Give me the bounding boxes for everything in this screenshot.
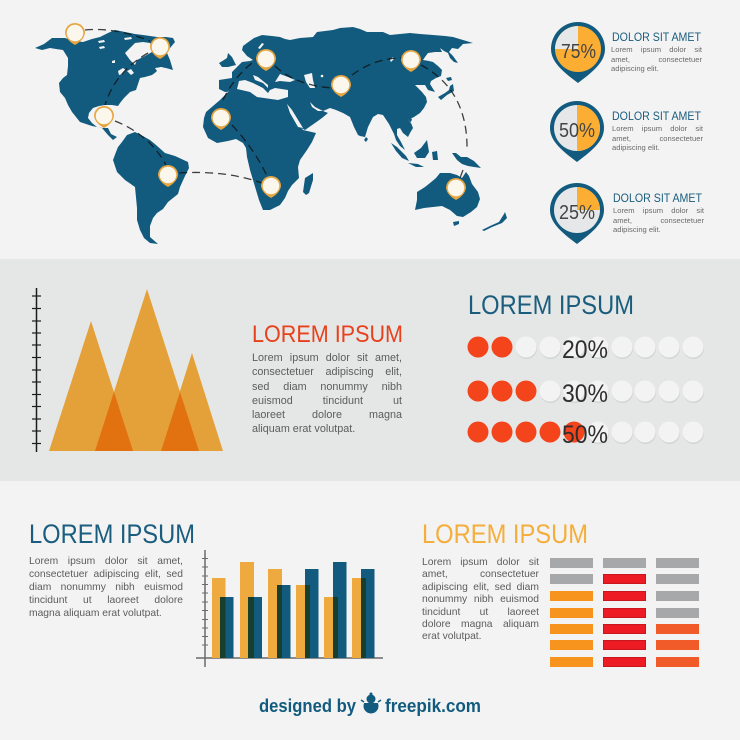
world map xyxy=(35,23,507,244)
overlap left xyxy=(95,392,133,451)
bottom left paragraph: magna aliquam erat volutpat. xyxy=(29,608,162,619)
bottom left paragraph xyxy=(29,556,183,619)
stat text 2: amet, consectetuer xyxy=(612,134,703,142)
North America xyxy=(35,30,175,140)
blue heading: LOREM IPSUM xyxy=(468,290,634,320)
bottom right paragraph: dolore magna aliquam xyxy=(422,619,539,630)
stat text 3: Lorem ipsum dolor sit xyxy=(613,206,704,215)
bar chart xyxy=(196,550,383,667)
dot rows xyxy=(468,336,704,449)
percent pin 50%: 50% xyxy=(559,120,595,142)
dot row 20% xyxy=(468,336,704,364)
bottom right paragraph xyxy=(422,557,539,642)
stat text 2: adipiscing elit. xyxy=(612,143,660,152)
seas and lakes xyxy=(98,37,394,128)
axes xyxy=(196,550,383,667)
bottom right heading: LOREM IPSUM xyxy=(422,519,588,549)
middle paragraph: Lorem ipsum dolor sit amet, xyxy=(252,352,402,364)
dashed routes xyxy=(85,29,467,183)
overlap right xyxy=(161,392,199,451)
stat text 1: adipiscing elit. xyxy=(611,64,659,73)
bottom right paragraph: nonummy nibh euismod xyxy=(422,594,539,605)
continents xyxy=(35,27,507,244)
bottom left paragraph: tincidunt ut laoreet dolore xyxy=(29,595,183,606)
footer credit xyxy=(259,692,481,716)
stat heading 3: DOLOR SIT AMET xyxy=(613,191,703,205)
islands xyxy=(219,53,507,231)
percent pin 75%: 75% xyxy=(561,41,596,63)
bottom right paragraph: tincidunt ut laoreet xyxy=(422,607,539,618)
Eurasia xyxy=(219,27,473,150)
dot row 30% xyxy=(468,380,704,408)
footer credit: freepik.com xyxy=(385,696,481,716)
bar overlaps xyxy=(220,578,366,658)
stat text 1 xyxy=(611,45,702,73)
stat heading 2: DOLOR SIT AMET xyxy=(612,109,702,123)
middle paragraph: sed diam nonummy nibh xyxy=(252,381,402,393)
icon: freepik mascot xyxy=(361,692,381,714)
stat text 3: adipiscing elit. xyxy=(613,225,661,234)
middle paragraph xyxy=(252,352,402,435)
middle paragraph: euismod tincidunt ut xyxy=(252,395,402,407)
bottom left paragraph: consectetuer adipiscing elit, sed xyxy=(29,569,183,580)
red heading: LOREM IPSUM xyxy=(252,321,403,348)
stat text 2: Lorem ipsum dolor sit xyxy=(612,124,703,133)
ruler axis xyxy=(32,288,41,452)
South America xyxy=(113,132,189,244)
bottom right paragraph: adipiscing elit, sed diam xyxy=(422,582,539,593)
bottom right paragraph: amet, consectetuer xyxy=(422,569,539,580)
middle paragraph: consectetuer adipiscing elit, xyxy=(252,366,402,378)
stat text 2 xyxy=(612,124,703,152)
middle paragraph: laoreet dolore magna xyxy=(252,409,402,421)
percent pin 50% xyxy=(550,101,604,162)
middle band background xyxy=(0,259,740,481)
percent pin 25% xyxy=(550,183,604,244)
stat text 3 xyxy=(613,206,704,234)
dot row 50% xyxy=(468,421,704,449)
dot row 20%: 20% xyxy=(562,336,608,364)
percent pin 25%: 25% xyxy=(559,202,595,224)
blue bars xyxy=(220,562,374,658)
dot row 30%: 30% xyxy=(562,380,608,408)
bottom right paragraph: erat volutpat. xyxy=(422,631,482,642)
Africa xyxy=(203,89,316,210)
stat text 1: Lorem ipsum dolor sit xyxy=(611,45,702,54)
stat text 1: amet, consectetuer xyxy=(611,54,702,64)
percent pin 75% xyxy=(551,22,605,83)
block grid xyxy=(550,558,699,667)
bottom left paragraph: diam nonummy nibh euismod xyxy=(29,582,183,593)
deep orange blocks xyxy=(656,624,699,667)
bottom right paragraph: Lorem ipsum dolor sit xyxy=(422,557,539,568)
stat text 3: amet, consectetuer xyxy=(613,216,704,224)
dot row 50%: 50% xyxy=(562,421,608,449)
stat heading 1: DOLOR SIT AMET xyxy=(612,30,702,44)
map pins xyxy=(65,23,466,200)
red blocks xyxy=(603,574,646,667)
middle paragraph: aliquam erat volutpat. xyxy=(252,423,355,435)
footer credit: designed by xyxy=(259,696,356,716)
triangles xyxy=(49,321,133,451)
orange blocks xyxy=(550,591,593,667)
Australia xyxy=(415,172,480,217)
orange bars xyxy=(212,562,366,658)
bottom left paragraph: Lorem ipsum dolor sit amet, xyxy=(29,556,183,567)
grey blocks xyxy=(550,558,699,618)
bottom left heading: LOREM IPSUM xyxy=(29,519,195,549)
mountain chart xyxy=(32,288,223,452)
